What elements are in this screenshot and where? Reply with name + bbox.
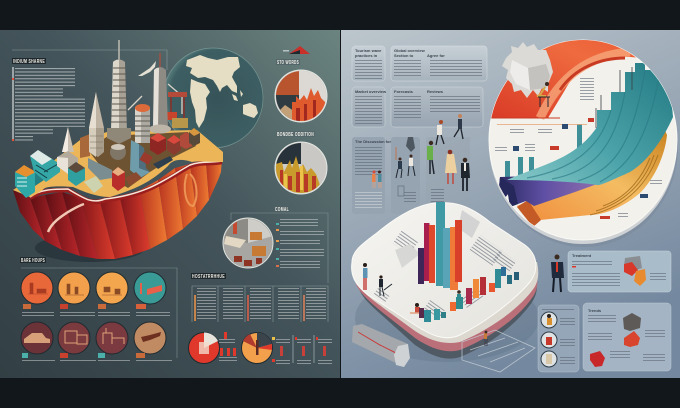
icon: portrait three: [541, 351, 557, 367]
heading: comal: [274, 206, 290, 213]
building: round tower: [118, 40, 120, 62]
card: global overview: Global overview: [394, 48, 426, 53]
building: brown side block: [80, 134, 90, 158]
card: strategy blocks: [583, 303, 671, 371]
icon circle 1: [21, 272, 53, 304]
building: teal terraces: [30, 150, 60, 182]
icon circle 3: [96, 272, 128, 304]
text fragments: [497, 124, 587, 125]
panel: top right badge: [283, 46, 310, 54]
panel: small figure columns: [272, 335, 332, 366]
icon circle 8: [134, 322, 166, 354]
building: teal cube: [68, 162, 85, 186]
text block: comal lines: [276, 217, 324, 270]
heading: circle one: [276, 59, 300, 66]
icon circle 6: [58, 322, 90, 354]
icon: plane: [138, 61, 156, 76]
icon: person green jacket: [427, 141, 434, 174]
text block: left bullet list: [12, 67, 85, 142]
icon: globe: [163, 48, 263, 148]
platform top: [352, 203, 536, 338]
card: treatment: Treatment: [572, 253, 592, 258]
bowl ribs: [13, 158, 222, 259]
table: five column list: [192, 286, 328, 322]
illustration: layered platform with bar chart: [352, 202, 539, 372]
bar chart: tall bars: [418, 202, 462, 290]
card: forecasts: Forecasts: [394, 89, 414, 94]
icon: person with cart: [379, 275, 392, 296]
card: market overview: [352, 87, 387, 127]
card: global overview: [391, 46, 487, 81]
panel: left dark infographic: [0, 30, 340, 378]
heading: table title: [191, 273, 226, 280]
icon: portrait two: [541, 332, 557, 348]
building: teal block left: [15, 165, 47, 198]
icon: grey block: [623, 313, 641, 331]
icon: person walking right: [454, 114, 463, 139]
icon: person on teal block: [457, 290, 461, 298]
panel: right light infographic: [341, 30, 680, 378]
card: forecasts: [391, 87, 483, 127]
heading: comal: COMAL: [275, 207, 289, 213]
icon: person with bag: [363, 263, 368, 290]
card: people group: [426, 114, 470, 214]
chart: red bar circle: [275, 70, 327, 124]
heading: circle two: BONDBE ODDITION: [277, 132, 314, 138]
building: frame and crane: [128, 84, 188, 128]
icon: two people: [372, 170, 382, 188]
heading: top left list: INDIUM SHARNE: [13, 59, 45, 65]
fragments on right: [650, 180, 662, 184]
icon: small person on lines: [484, 331, 487, 346]
icon: red block: [624, 331, 640, 347]
chart: red pie: [188, 332, 220, 364]
building: red blocks: [150, 128, 200, 155]
captions under circles: [22, 304, 172, 363]
purple layer: [499, 176, 596, 206]
heading: bare houps: [20, 257, 46, 264]
icon: red cube pair: [590, 351, 605, 367]
icon: person in suit: [461, 158, 470, 191]
card: lower text with figures: [352, 137, 391, 214]
icon: seated worker: [537, 82, 550, 107]
icon circle 5: [21, 322, 53, 354]
icon: spiked gear: [502, 42, 553, 98]
platform lower layers: [358, 278, 537, 359]
city shadow mass: [88, 132, 196, 188]
card: strategy blocks: Trends: [588, 308, 602, 313]
card: tourism wave: [352, 46, 385, 81]
card: treatment: [568, 251, 671, 292]
diagram: floor wiring lines: [462, 330, 535, 372]
icon: lamp and two workers: [396, 137, 416, 202]
building: second tower: [149, 53, 171, 134]
icon: stone cylinder machine: [352, 324, 410, 367]
chart: yellow bar circle: [275, 142, 329, 196]
building: glass slab: [130, 140, 150, 178]
heading: bare houps: BARE HOUPS: [21, 258, 45, 264]
icon: seated reader: [410, 303, 424, 318]
building: main tower: [107, 60, 131, 160]
illustration: island city on striped bowl: [13, 40, 223, 262]
small bars: [505, 161, 510, 177]
icon: portrait one: [541, 312, 557, 328]
card: global overview: Section to: [394, 53, 414, 58]
frill: [30, 162, 222, 202]
panel: eight icon circles: [21, 268, 177, 363]
card: tourism wave: practices in: [355, 53, 378, 58]
building: round tower: [135, 104, 150, 143]
card: market overview: Market overview: [355, 89, 387, 94]
card: tourism wave: Tourism wave: [355, 48, 382, 53]
icon: people figures near pie: [219, 332, 237, 363]
bar chart: small bars: [424, 267, 519, 322]
building: tall spire: [89, 92, 104, 157]
card: lower text with figures: The Discussion for: [355, 139, 391, 144]
icon: red cubes: [624, 256, 646, 286]
island surface: [13, 130, 223, 197]
chart: orange pie: [242, 332, 272, 364]
icon: person walking top: [436, 120, 444, 145]
card: three round portraits: [538, 305, 579, 372]
yellow layers: [517, 128, 667, 227]
card: forecasts: Reviews: [427, 89, 444, 94]
heading: circle two: [276, 131, 315, 138]
icon: businessman: [551, 254, 564, 292]
icon circle 2: [58, 272, 90, 304]
heading: table title: HOSTATRRHHUE: [192, 274, 225, 280]
teal wave: [507, 63, 673, 185]
paper text patches: [373, 210, 516, 319]
icon circle 4: [134, 272, 166, 304]
building: lower blocks: [84, 152, 173, 193]
chart: large circular wave graphic: [485, 30, 680, 247]
panel: comal list: [223, 213, 328, 283]
icon: person beige coat: [445, 150, 457, 184]
heading: circle one: STO WORDS: [277, 60, 299, 66]
building: small spire: [57, 127, 78, 174]
red arc: [491, 40, 636, 118]
icon: production circle: [223, 218, 273, 268]
card: middle figures: [391, 137, 420, 214]
card: global overview: Agree for: [427, 53, 445, 58]
map continents: [186, 55, 258, 128]
icon circle 7: [96, 322, 128, 354]
heading: top left list: [12, 50, 167, 70]
